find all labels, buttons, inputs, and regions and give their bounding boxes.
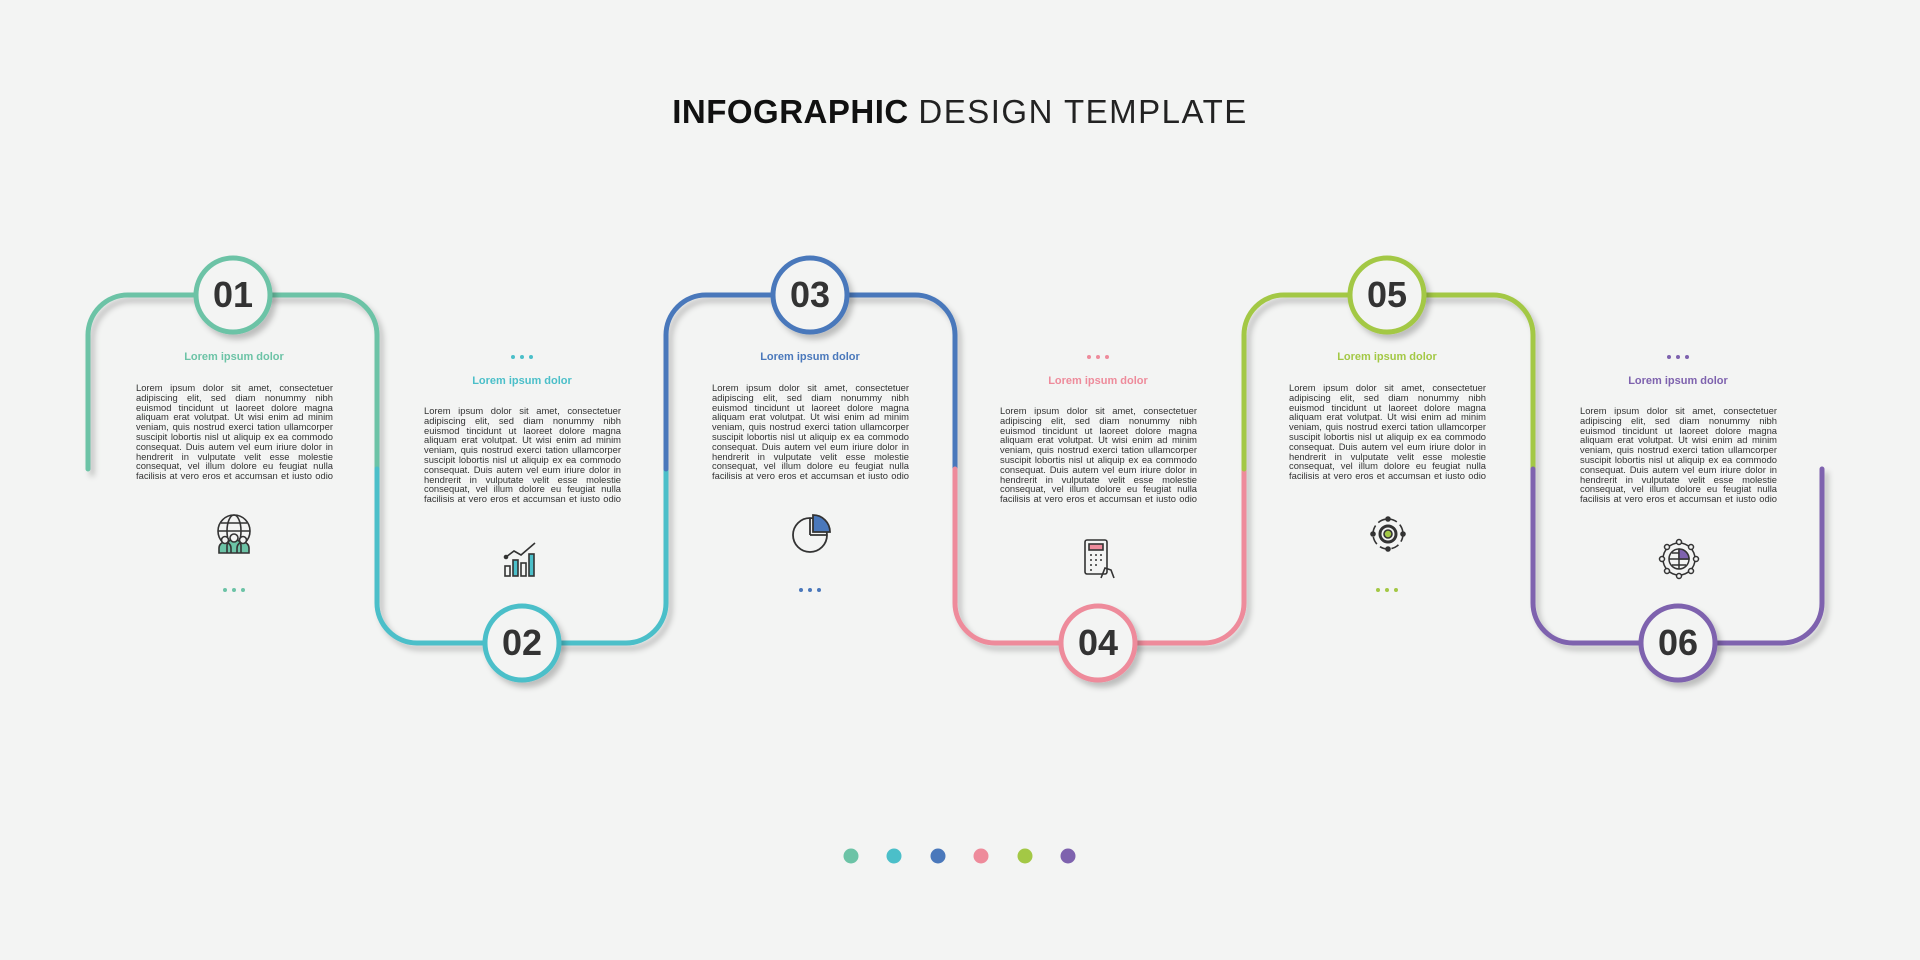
text 5: facilisis at vero eros et accumsan et iusto odio [1289, 470, 1486, 481]
text 6: Lorem ipsum dolor sit amet, consectetuer [1580, 405, 1777, 416]
text 6: consequat. Duis autem vel eum iriure dolor in [1580, 464, 1777, 475]
text 2: aliquam erat volutpat. Ut wisi enim ad minim [424, 434, 621, 445]
dots 2 [511, 355, 533, 359]
dots 6 [1667, 355, 1689, 359]
text 4: consequat. Duis autem vel eum iriure dolor in [1000, 464, 1197, 475]
text 3: consequat, vel illum dolore eu feugiat nulla [712, 460, 909, 471]
text 3: Lorem ipsum dolor sit amet, consectetuer [712, 382, 909, 393]
icon: globe people [217, 514, 251, 554]
icon: calculator in hand [1084, 539, 1115, 578]
text 4 [1000, 405, 1197, 504]
text 1: veniam, quis nostrud exerci tation ullamcorper [136, 421, 333, 432]
text 5: suscipit lobortis nisl ut aliquip ex ea commodo [1289, 431, 1486, 442]
text 5: consequat. Duis autem vel eum iriure dolor in [1289, 441, 1486, 452]
text 5: aliquam erat volutpat. Ut wisi enim ad minim [1289, 411, 1486, 422]
dots 5 [1376, 588, 1398, 592]
heading 5: Lorem ipsum dolor [1337, 351, 1437, 363]
text 2: veniam, quis nostrud exerci tation ullamcorper [424, 444, 621, 455]
text 2: consequat. Duis autem vel eum iriure dolor in [424, 464, 621, 475]
heading 3: Lorem ipsum dolor [760, 351, 860, 363]
text 5: adipiscing elit, sed diam nonummy nibh [1289, 392, 1486, 403]
text 3: facilisis at vero eros et accumsan et iusto odio [712, 470, 909, 481]
text 6: consequat, vel illum dolore eu feugiat nulla [1580, 483, 1777, 494]
dots 4 [1087, 355, 1109, 359]
icon: bar chart [504, 542, 536, 577]
text 6: facilisis at vero eros et accumsan et iusto odio [1580, 493, 1777, 504]
text 6: suscipit lobortis nisl ut aliquip ex ea commodo [1580, 454, 1777, 465]
text 2: facilisis at vero eros et accumsan et iusto odio [424, 493, 621, 504]
dots 3 [799, 588, 821, 592]
heading 1: Lorem ipsum dolor [184, 351, 284, 363]
text 1: facilisis at vero eros et accumsan et iusto odio [136, 470, 333, 481]
number 02: 02 [502, 622, 542, 663]
number 06: 06 [1658, 622, 1698, 663]
text 4: aliquam erat volutpat. Ut wisi enim ad minim [1000, 434, 1197, 445]
text 4: facilisis at vero eros et accumsan et iusto odio [1000, 493, 1197, 504]
title: INFOGRAPHIC DESIGN TEMPLATE [672, 93, 1248, 130]
number 04: 04 [1078, 622, 1118, 663]
text 5: consequat, vel illum dolore eu feugiat nulla [1289, 460, 1486, 471]
text 3 [712, 382, 909, 481]
panel 6 [1580, 355, 1777, 580]
text 4: veniam, quis nostrud exerci tation ullamcorper [1000, 444, 1197, 455]
text 6 [1580, 405, 1777, 504]
number 03: 03 [790, 274, 830, 315]
text 2: adipiscing elit, sed diam nonummy nibh [424, 415, 621, 426]
text 1: euismod tincidunt ut laoreet dolore magna [136, 402, 333, 413]
text 1: consequat, vel illum dolore eu feugiat nulla [136, 460, 333, 471]
legend dots [844, 848, 1076, 864]
text 1: hendrerit in vulputate velit esse molestie [136, 451, 333, 462]
text 4: Lorem ipsum dolor sit amet, consectetuer [1000, 405, 1197, 416]
text 2: euismod tincidunt ut laoreet dolore magna [424, 425, 621, 436]
text 5: euismod tincidunt ut laoreet dolore magna [1289, 402, 1486, 413]
text 6: euismod tincidunt ut laoreet dolore magna [1580, 425, 1777, 436]
text 4: euismod tincidunt ut laoreet dolore magna [1000, 425, 1197, 436]
icon: pie chart [792, 514, 831, 553]
panel 5 [1289, 351, 1486, 592]
panel 1 [136, 351, 333, 592]
panel 3 [712, 351, 909, 592]
heading 6: Lorem ipsum dolor [1628, 375, 1728, 387]
icon: gear cycle [1370, 516, 1406, 552]
text 4: consequat, vel illum dolore eu feugiat nulla [1000, 483, 1197, 494]
text 3: suscipit lobortis nisl ut aliquip ex ea commodo [712, 431, 909, 442]
text 2 [424, 405, 621, 504]
text 3: adipiscing elit, sed diam nonummy nibh [712, 392, 909, 403]
text 3: veniam, quis nostrud exerci tation ullamcorper [712, 421, 909, 432]
number 01: 01 [213, 274, 253, 315]
text 2: hendrerit in vulputate velit esse molestie [424, 474, 621, 485]
text 2: Lorem ipsum dolor sit amet, consectetuer [424, 405, 621, 416]
text 6: hendrerit in vulputate velit esse molestie [1580, 474, 1777, 485]
text 3: consequat. Duis autem vel eum iriure dolor in [712, 441, 909, 452]
dots 1 [223, 588, 245, 592]
icon: network globe [1658, 538, 1700, 580]
text 1: consequat. Duis autem vel eum iriure dolor in [136, 441, 333, 452]
text 6: veniam, quis nostrud exerci tation ullamcorper [1580, 444, 1777, 455]
text 1: aliquam erat volutpat. Ut wisi enim ad minim [136, 411, 333, 422]
text 4: suscipit lobortis nisl ut aliquip ex ea commodo [1000, 454, 1197, 465]
text 3: aliquam erat volutpat. Ut wisi enim ad minim [712, 411, 909, 422]
text 1: suscipit lobortis nisl ut aliquip ex ea commodo [136, 431, 333, 442]
text 2: consequat, vel illum dolore eu feugiat nulla [424, 483, 621, 494]
text 2: suscipit lobortis nisl ut aliquip ex ea commodo [424, 454, 621, 465]
text 4: adipiscing elit, sed diam nonummy nibh [1000, 415, 1197, 426]
text 1: Lorem ipsum dolor sit amet, consectetuer [136, 382, 333, 393]
text 5 [1289, 382, 1486, 481]
text 1 [136, 382, 333, 481]
number 05: 05 [1367, 274, 1407, 315]
text 1: adipiscing elit, sed diam nonummy nibh [136, 392, 333, 403]
text 3: euismod tincidunt ut laoreet dolore magna [712, 402, 909, 413]
heading 4: Lorem ipsum dolor [1048, 375, 1148, 387]
text 3: hendrerit in vulputate velit esse molestie [712, 451, 909, 462]
heading 2: Lorem ipsum dolor [472, 375, 572, 387]
text 6: aliquam erat volutpat. Ut wisi enim ad minim [1580, 434, 1777, 445]
text 4: hendrerit in vulputate velit esse molestie [1000, 474, 1197, 485]
text 5: Lorem ipsum dolor sit amet, consectetuer [1289, 382, 1486, 393]
panel 4 [1000, 355, 1197, 578]
text 5: hendrerit in vulputate velit esse molestie [1289, 451, 1486, 462]
text 6: adipiscing elit, sed diam nonummy nibh [1580, 415, 1777, 426]
text 5: veniam, quis nostrud exerci tation ullamcorper [1289, 421, 1486, 432]
panel 2 [424, 355, 621, 577]
